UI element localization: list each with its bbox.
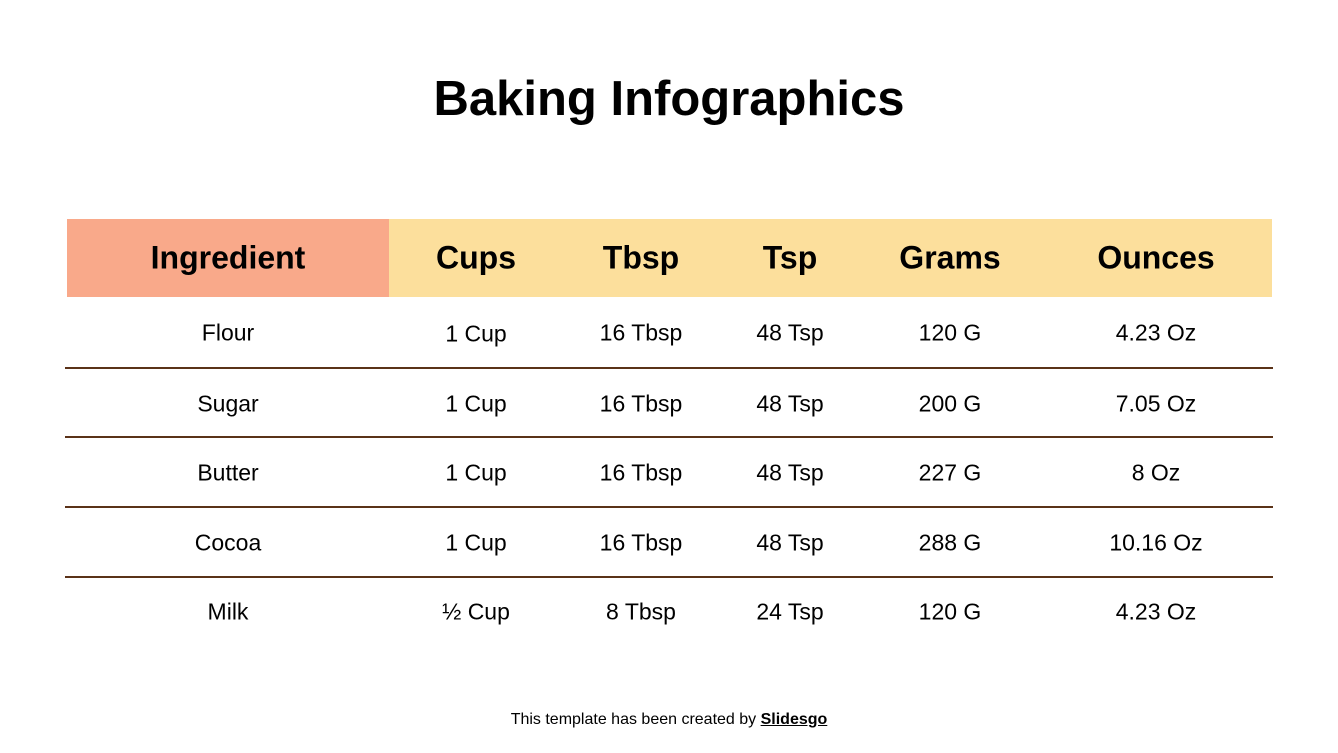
row: butter: 16 Tbsp <box>600 460 682 486</box>
row: flour: 4.23 Oz <box>1116 320 1196 346</box>
row: flour <box>202 320 1196 346</box>
row: milk: 24 Tsp <box>756 598 824 624</box>
title: Baking Infographics <box>433 72 904 126</box>
row: butter: 227 G <box>919 460 981 486</box>
row: milk: 8 Tbsp <box>606 598 676 624</box>
header labels: Tsp <box>763 240 817 276</box>
row: milk: ½ Cup <box>442 598 510 624</box>
footer credit: This template has been created by Slidesgo <box>511 711 827 728</box>
header labels: Ounces <box>1097 240 1215 276</box>
row: flour: 120 G <box>919 320 981 346</box>
row: sugar: 16 Tbsp <box>600 390 682 416</box>
row: cocoa: 10.16 Oz <box>1109 530 1203 556</box>
header labels: Tbsp <box>603 240 679 276</box>
row: sugar: Sugar <box>197 390 259 416</box>
header labels: Ingredient <box>151 240 305 276</box>
header labels: Cups <box>436 240 516 276</box>
row: milk: Milk <box>208 598 248 624</box>
row: sugar: 200 G <box>919 390 981 416</box>
row: sugar <box>197 390 1196 416</box>
row: milk <box>208 598 1196 624</box>
row: cocoa <box>195 530 1203 556</box>
row: flour: Flour <box>202 320 254 346</box>
row: cocoa: Cocoa <box>195 530 261 556</box>
row: butter: 1 Cup <box>445 460 507 486</box>
row: flour: 1 Cup <box>445 320 507 346</box>
row: milk: 120 G <box>919 598 981 624</box>
header labels: Grams <box>899 240 1001 276</box>
row: butter: 48 Tsp <box>756 460 824 486</box>
header: unit cells <box>389 219 1272 297</box>
header: ingredient cell <box>67 219 389 297</box>
row: sugar: 7.05 Oz <box>1116 390 1196 416</box>
row: cocoa: 16 Tbsp <box>600 530 682 556</box>
row: butter <box>197 460 1180 486</box>
row: butter: 8 Oz <box>1132 460 1180 486</box>
row: sugar: 48 Tsp <box>756 390 824 416</box>
row: sugar: 1 Cup <box>445 390 507 416</box>
row: flour: 48 Tsp <box>756 320 824 346</box>
row: cocoa: 1 Cup <box>445 530 507 556</box>
row: cocoa: 48 Tsp <box>756 530 824 556</box>
row: milk: 4.23 Oz <box>1116 598 1196 624</box>
row: cocoa: 288 G <box>919 530 981 556</box>
header labels <box>151 240 1215 276</box>
row: flour: 16 Tbsp <box>600 320 682 346</box>
row: butter: Butter <box>197 460 259 486</box>
